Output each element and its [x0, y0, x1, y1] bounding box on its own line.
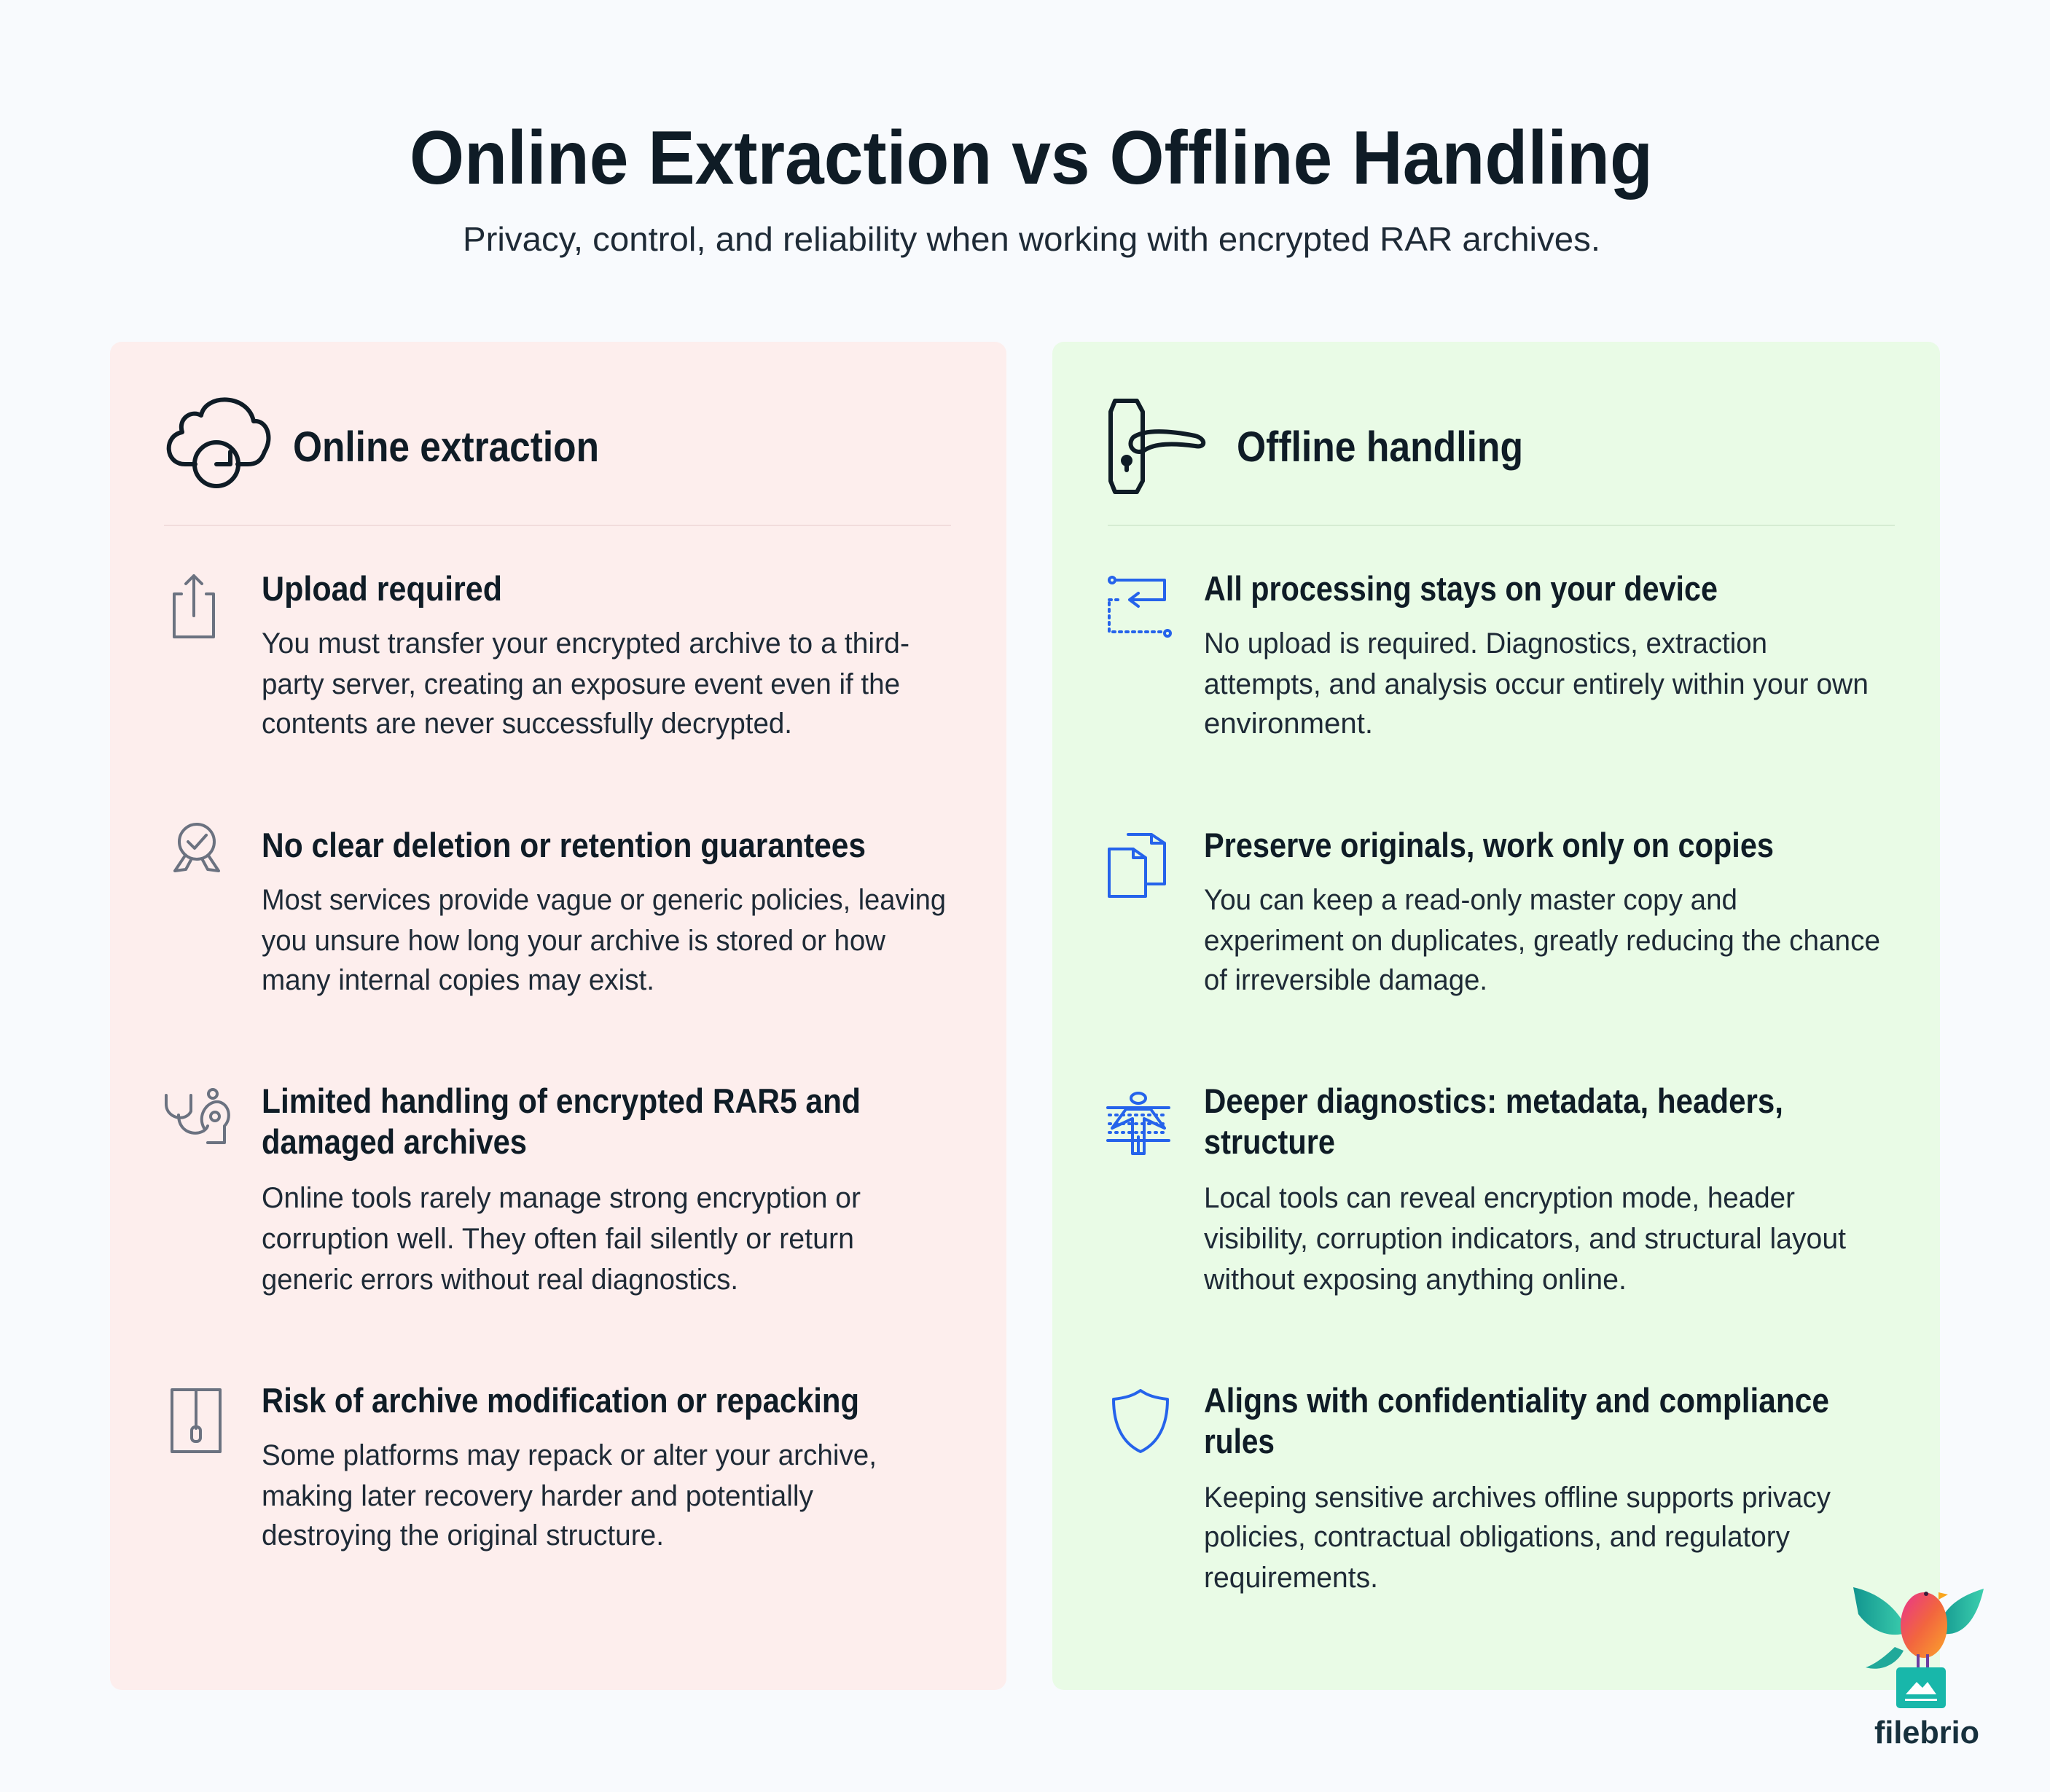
- item: limited RAR5 handling: damaged archives: [262, 1122, 527, 1161]
- item: compliance: rules: [1204, 1422, 1275, 1460]
- item: deeper diagnostics: structure: [1204, 1122, 1335, 1161]
- item: deeper diagnostics: Deeper diagnostics: metadata, headers,: [1204, 1081, 1783, 1120]
- item: preserve originals: [1109, 826, 1880, 996]
- item: no deletion guarantees: you unsure how long your archive is stored or how: [262, 925, 885, 957]
- item: no deletion guarantees: No clear deletion or retention guarantees: [262, 826, 866, 864]
- item: preserve originals: experiment on duplicates, greatly reducing the chance: [1204, 925, 1880, 957]
- icon: shield: [1114, 1390, 1167, 1452]
- icon: upload: [174, 576, 214, 637]
- item: deeper diagnostics: [1108, 1081, 1846, 1296]
- item: modification risk: Some platforms may repack or alter your archive,: [262, 1439, 877, 1471]
- item: modification risk: destroying the original structure.: [262, 1519, 664, 1552]
- icon: copies: [1109, 834, 1165, 896]
- item: limited RAR5 handling: Limited handling of encrypted RAR5 and: [262, 1081, 861, 1120]
- icon: stethoscope: [166, 1089, 229, 1143]
- icon: cloud refresh: [169, 399, 268, 486]
- item: limited RAR5 handling: corruption well. They often fail silently or return: [262, 1223, 854, 1255]
- item: compliance: Keeping sensitive archives offline supports privacy: [1204, 1482, 1831, 1514]
- item: processing on device: environment.: [1204, 708, 1373, 740]
- item: compliance: requirements.: [1204, 1562, 1378, 1594]
- panel: offline handling: [1052, 342, 1940, 1690]
- item: deeper diagnostics: without exposing anything online.: [1203, 1264, 1627, 1296]
- icon: local flow: [1109, 577, 1170, 636]
- item: preserve originals: of irreversible damage.: [1204, 964, 1487, 996]
- icon: zipper box: [172, 1390, 220, 1452]
- item: no deletion guarantees: Most services provide vague or generic policies, leaving: [262, 884, 946, 916]
- item: no deletion guarantees: [175, 824, 946, 996]
- item: deeper diagnostics: Local tools can reveal encryption mode, header: [1204, 1182, 1795, 1214]
- item: modification risk: [172, 1381, 877, 1552]
- item: processing on device: No upload is required. Diagnostics, extraction: [1204, 627, 1767, 660]
- item: processing on device: attempts, and analysis occur entirely within your own: [1204, 668, 1869, 700]
- item: limited RAR5 handling: generic errors without real diagnostics.: [262, 1264, 738, 1296]
- logo: filebrio bird: [1853, 1587, 1984, 1750]
- item: upload required: [174, 569, 909, 740]
- subtitle: Privacy, control, and reliability when working with encrypted RAR archives.: [463, 220, 1600, 258]
- icon: door handle: [1111, 401, 1203, 492]
- item: upload required: contents are never successfully decrypted.: [262, 708, 792, 740]
- item: modification risk: making later recovery harder and potentially: [262, 1480, 813, 1512]
- item: limited RAR5 handling: [166, 1081, 861, 1296]
- item: upload required: Upload required: [262, 569, 502, 608]
- panel: online extraction: [110, 342, 1006, 1690]
- title: Online Extraction vs Offline Handling: [410, 116, 1653, 200]
- item: compliance: policies, contractual obligations, and regulatory: [1204, 1521, 1790, 1553]
- item: upload required: You must transfer your encrypted archive to a third-: [262, 627, 909, 660]
- item: limited RAR5 handling: Online tools rarely manage strong encryption or: [262, 1182, 861, 1214]
- logo text: filebrio: [1874, 1715, 1979, 1750]
- item: processing on device: All processing stays on your device: [1204, 569, 1718, 608]
- item: deeper diagnostics: visibility, corruption indicators, and structural layout: [1204, 1223, 1846, 1255]
- item: modification risk: Risk of archive modification or repacking: [262, 1381, 859, 1420]
- item: compliance: Aligns with confidentiality and compliance: [1204, 1381, 1829, 1420]
- item: upload required: party server, creating an exposure event even if the: [262, 668, 900, 700]
- item: preserve originals: Preserve originals, work only on copies: [1204, 826, 1774, 864]
- icon: badge: [175, 824, 219, 871]
- icon: scan person: [1108, 1093, 1169, 1154]
- item: compliance: [1114, 1381, 1831, 1594]
- heading: online extraction: Online extraction: [293, 423, 599, 471]
- item: no deletion guarantees: many internal copies may exist.: [262, 964, 654, 996]
- item: preserve originals: You can keep a read-only master copy and: [1204, 884, 1737, 916]
- heading: offline handling: Offline handling: [1237, 423, 1523, 471]
- item: processing on device: [1109, 569, 1869, 740]
